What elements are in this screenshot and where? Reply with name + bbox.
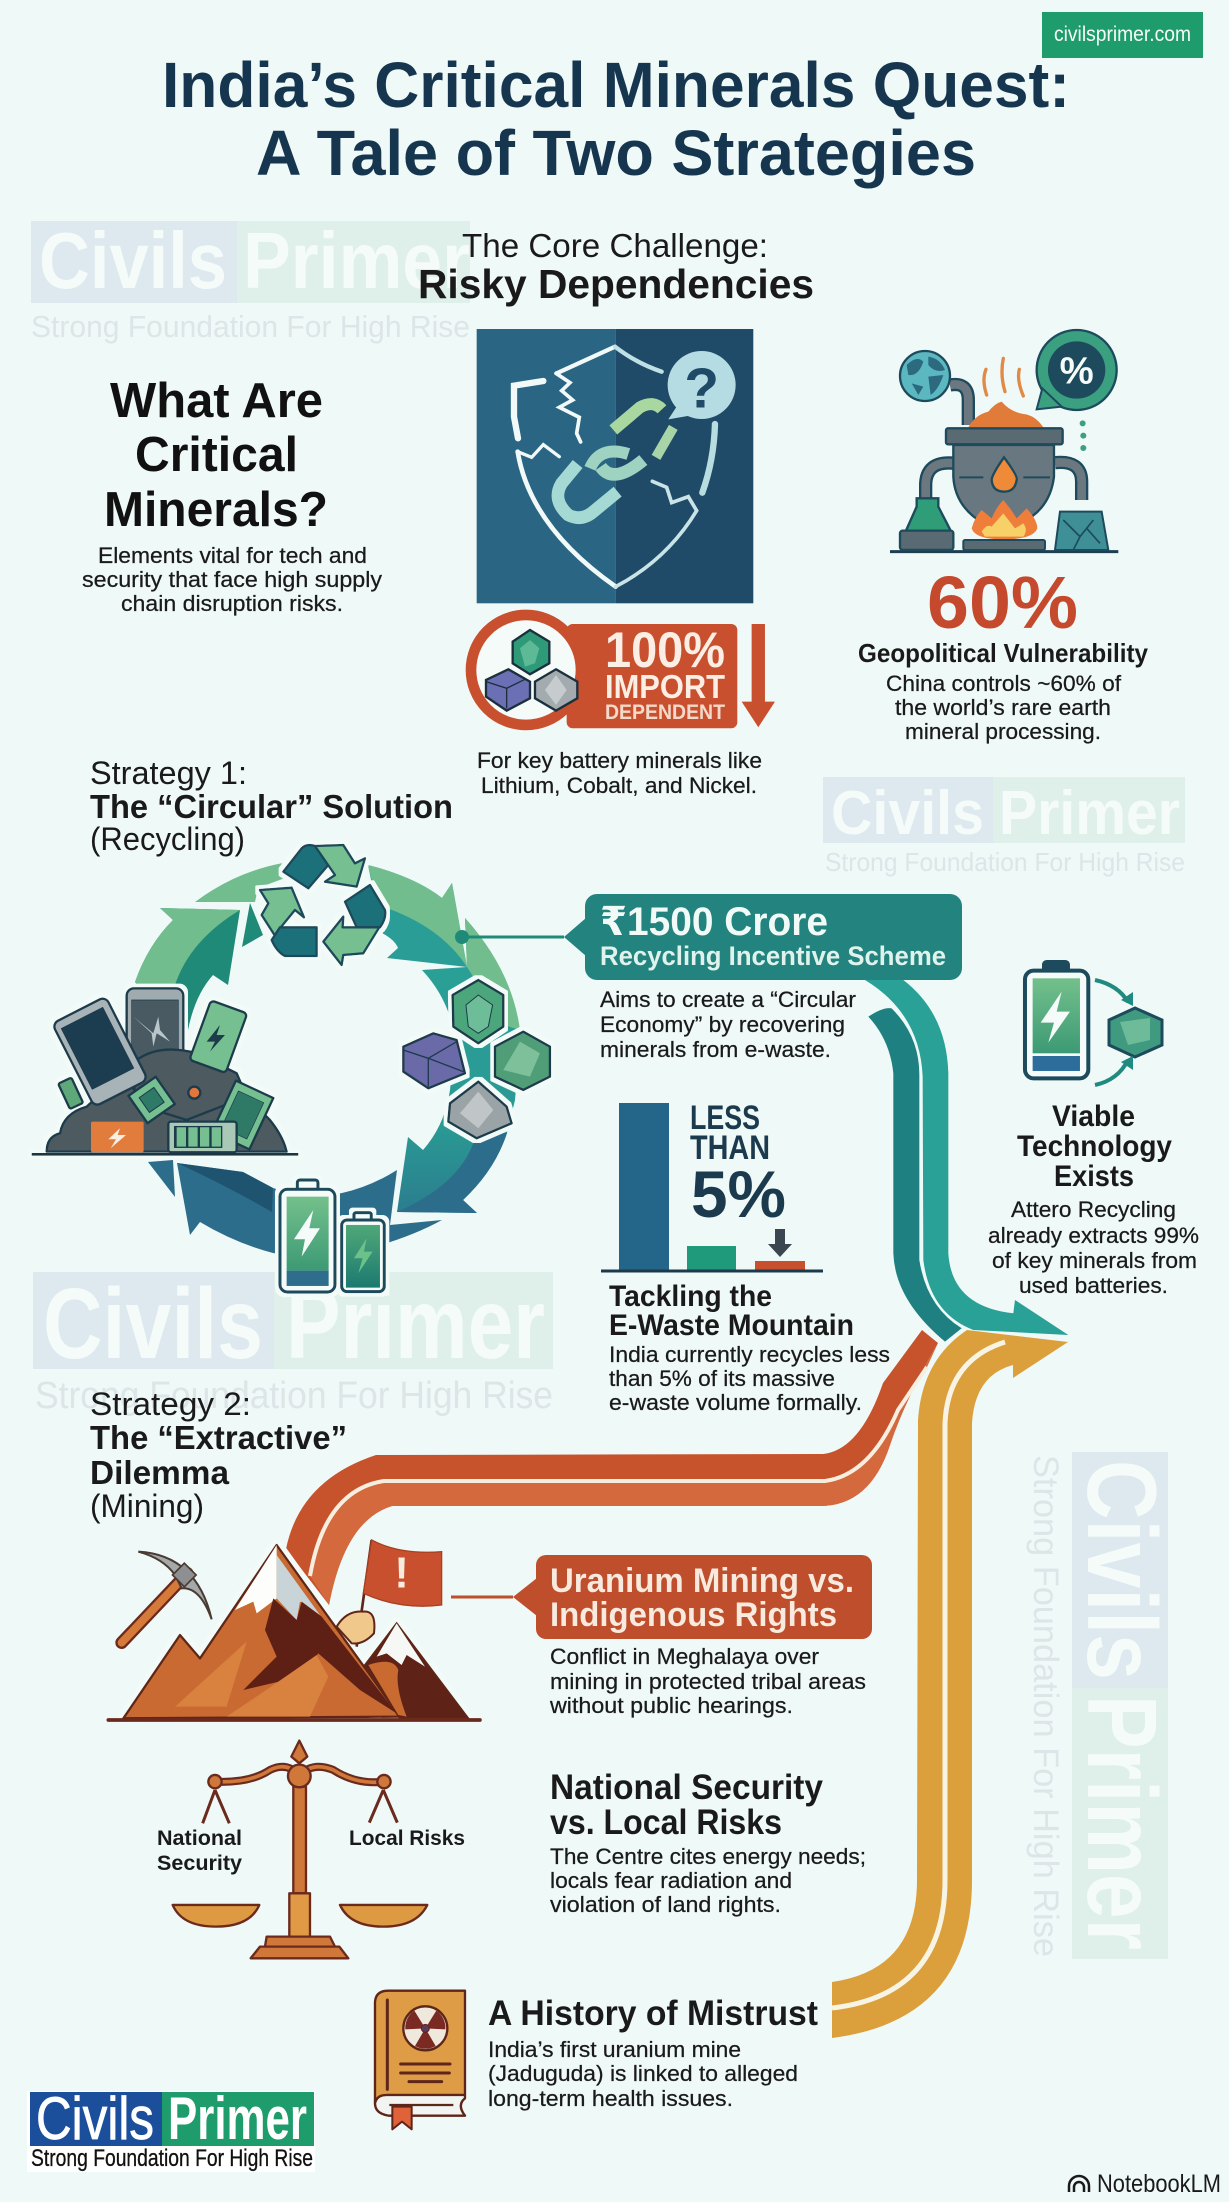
icon: battery to mineral bbox=[1025, 962, 1162, 1085]
callout: recycling scheme: Aims to create a “Circular bbox=[600, 987, 857, 1012]
icon: processing cauldron bbox=[890, 330, 1118, 552]
bar chart: less than 5%: LESS bbox=[690, 1099, 760, 1137]
watermark: middle left: Strong Foundation For High Rise bbox=[35, 1375, 553, 1417]
panel: what are critical minerals: Elements vital for tech and bbox=[98, 543, 367, 568]
heading: strategy 2: (Mining) bbox=[90, 1488, 204, 1524]
callout: uranium mining bbox=[451, 1555, 872, 1718]
watermark: upper right: Primer bbox=[999, 779, 1180, 848]
icon: recovered minerals bbox=[403, 980, 550, 1138]
panel: viable technology: of key minerals from bbox=[992, 1248, 1197, 1273]
callout: 100% import dependent: 100% bbox=[605, 622, 725, 678]
panel: e-waste mountain: India currently recycles less bbox=[609, 1342, 890, 1367]
arrow: yellow mining flow bbox=[832, 1330, 1068, 2038]
watermark: middle left: Primer bbox=[286, 1268, 545, 1380]
heading: strategy 1: The “Circular” Solution bbox=[90, 788, 453, 825]
icon: mountain with pickaxe and flag bbox=[108, 1540, 480, 1720]
panel: national security vs local risks bbox=[550, 1768, 866, 1917]
bar chart: less than 5%: 5% bbox=[691, 1157, 786, 1231]
callout: 100% import dependent bbox=[471, 615, 775, 728]
panel: what are critical minerals: Critical bbox=[135, 428, 298, 482]
watermark: upper right bbox=[823, 777, 1185, 877]
watermark: top left bbox=[31, 216, 470, 344]
website badge bbox=[1042, 12, 1203, 58]
connector dot bbox=[455, 930, 469, 944]
heading: core challenge bbox=[418, 227, 814, 307]
watermark: top left: Civils bbox=[39, 216, 227, 305]
callout: 100% import dependent: IMPORT bbox=[605, 668, 725, 705]
icon: balance scale: National bbox=[157, 1827, 242, 1850]
panel: what are critical minerals: What Are bbox=[110, 374, 323, 428]
panel: what are critical minerals: Minerals? bbox=[104, 483, 328, 537]
panel: history of mistrust bbox=[488, 1994, 818, 2111]
panel: e-waste mountain: E-Waste Mountain bbox=[609, 1309, 854, 1342]
callout: recycling scheme: Recycling Incentive Scheme bbox=[600, 941, 946, 971]
callout: recycling scheme: minerals from e-waste. bbox=[600, 1037, 831, 1062]
text: battery minerals: Lithium, Cobalt, and Nickel. bbox=[481, 773, 757, 798]
heading: strategy 2: Strategy 2: bbox=[90, 1386, 251, 1422]
watermark: top left: Strong Foundation For High Rise bbox=[31, 309, 470, 344]
stat: 60% geopolitical vulnerability: Geopolitical Vulnerability bbox=[858, 638, 1148, 668]
logo: Civils Primer: Primer bbox=[168, 2085, 307, 2152]
panel: e-waste mountain: e-waste volume formally. bbox=[609, 1390, 862, 1415]
callout: uranium mining: without public hearings. bbox=[549, 1693, 793, 1718]
panel: history of mistrust: long-term health issues. bbox=[488, 2086, 733, 2111]
panel: viable technology bbox=[988, 1100, 1199, 1298]
callout: recycling scheme: ₹1500 Crore bbox=[600, 900, 828, 944]
panel: viable technology: Viable bbox=[1052, 1100, 1135, 1133]
panel: history of mistrust: (Jaduguda) is linked to alleged bbox=[488, 2061, 798, 2086]
callout: uranium mining: Conflict in Meghalaya over bbox=[550, 1644, 820, 1669]
watermark: vertical right: Primer bbox=[1067, 1695, 1177, 1950]
stat: 60% geopolitical vulnerability: 60% bbox=[927, 561, 1078, 644]
watermark: vertical right: Civils bbox=[1067, 1460, 1177, 1680]
heading: strategy 2 bbox=[90, 1386, 347, 1524]
stat: 60% geopolitical vulnerability: the world’s rare earth bbox=[895, 695, 1111, 720]
icon: balance scale: Security bbox=[157, 1852, 242, 1875]
heading: strategy 2: The “Extractive” bbox=[90, 1419, 347, 1456]
icon: broken shield and chain bbox=[477, 329, 753, 603]
panel: what are critical minerals bbox=[82, 374, 383, 616]
panel: viable technology: used batteries. bbox=[1019, 1273, 1168, 1298]
panel: national security vs local risks: violation of land rights. bbox=[550, 1892, 781, 1917]
callout: uranium mining: Indigenous Rights bbox=[550, 1596, 837, 1634]
icon: e-waste pile bbox=[32, 988, 298, 1154]
icon: book with radiation symbol bbox=[375, 1991, 465, 2129]
watermark: vertical right bbox=[1026, 1452, 1177, 1959]
icon: mountain with pickaxe and flag: ! bbox=[394, 1549, 409, 1597]
diagram: circular economy loop bbox=[32, 845, 550, 1292]
panel: history of mistrust: India’s first uranium mine bbox=[488, 2037, 741, 2062]
arrow: red extractive flow bbox=[286, 1330, 938, 1605]
title: India’s Critical Minerals Quest: bbox=[162, 49, 1070, 121]
title: A Tale of Two Strategies bbox=[256, 117, 976, 189]
panel: e-waste mountain: Tackling the bbox=[609, 1280, 772, 1313]
stat: 60% geopolitical vulnerability bbox=[858, 561, 1148, 744]
logo: Civils Primer bbox=[27, 2085, 315, 2172]
title bbox=[162, 49, 1070, 189]
panel: history of mistrust: A History of Mistrust bbox=[488, 1994, 818, 2033]
bar chart: less than 5% bbox=[601, 1099, 823, 1271]
bar chart: less than 5%: THAN bbox=[690, 1129, 770, 1167]
panel: viable technology: already extracts 99% bbox=[988, 1223, 1199, 1248]
heading: core challenge: Risky Dependencies bbox=[418, 261, 814, 307]
icon: recycling symbol bbox=[260, 845, 385, 965]
arrow: bottom of loop bbox=[148, 1160, 442, 1256]
heading: core challenge: The Core Challenge: bbox=[462, 227, 768, 264]
callout: uranium mining: mining in protected tribal areas bbox=[550, 1669, 866, 1694]
icon: balance scale: Local Risks bbox=[349, 1827, 465, 1850]
panel: viable technology: Exists bbox=[1054, 1160, 1134, 1193]
panel: e-waste mountain: than 5% of its massive bbox=[609, 1366, 835, 1391]
watermark: upper right: Strong Foundation For High Rise bbox=[825, 847, 1185, 877]
watermark: middle left: Civils bbox=[43, 1268, 263, 1380]
callout: recycling scheme bbox=[462, 894, 962, 1062]
icon: balance scale bbox=[157, 1741, 465, 1958]
callout: uranium mining: Uranium Mining vs. bbox=[550, 1562, 854, 1600]
panel: national security vs local risks: The Centre cites energy needs; bbox=[550, 1844, 866, 1869]
heading: strategy 1: (Recycling) bbox=[90, 821, 245, 857]
panel: what are critical minerals: chain disruption risks. bbox=[121, 591, 343, 616]
panel: e-waste mountain bbox=[609, 1280, 890, 1415]
icon: batteries bbox=[280, 1180, 384, 1292]
arrow: teal recycling flow bbox=[865, 980, 1068, 1342]
logo: Civils Primer: Strong Foundation For High Rise bbox=[31, 2145, 313, 2172]
logo: Civils Primer: Civils bbox=[36, 2085, 154, 2152]
stat: 60% geopolitical vulnerability: mineral processing. bbox=[905, 719, 1101, 744]
watermark: vertical right: Strong Foundation For High Rise bbox=[1026, 1455, 1065, 1957]
callout: 100% import dependent: DEPENDENT bbox=[605, 701, 725, 724]
watermark: upper right: Civils bbox=[831, 779, 984, 848]
text: battery minerals bbox=[477, 748, 762, 798]
stat: 60% geopolitical vulnerability: China controls ~60% of bbox=[886, 671, 1122, 696]
watermark: middle left bbox=[33, 1268, 553, 1417]
arrow: right of loop bbox=[397, 918, 520, 1213]
icon: processing cauldron: % bbox=[1060, 349, 1094, 392]
heading: strategy 1: Strategy 1: bbox=[90, 755, 247, 791]
watermark: top left: Primer bbox=[243, 216, 470, 305]
panel: viable technology: Attero Recycling bbox=[1011, 1197, 1176, 1222]
panel: national security vs local risks: vs. Local Risks bbox=[550, 1803, 782, 1842]
arrow: top right of loop bbox=[368, 865, 467, 967]
website badge: civilsprimer.com bbox=[1054, 23, 1191, 46]
callout: recycling scheme: Economy” by recovering bbox=[600, 1012, 845, 1037]
panel: viable technology: Technology bbox=[1017, 1130, 1172, 1163]
heading: strategy 2: Dilemma bbox=[90, 1454, 230, 1491]
panel: what are critical minerals: security that face high supply bbox=[82, 567, 383, 592]
panel: national security vs local risks: locals fear radiation and bbox=[550, 1868, 792, 1893]
panel: national security vs local risks: National Security bbox=[550, 1768, 824, 1807]
icon: broken shield and chain: ? bbox=[684, 357, 719, 420]
heading: strategy 1 bbox=[90, 755, 453, 857]
arrow: left of loop bbox=[135, 863, 285, 1030]
text: battery minerals: For key battery minerals like bbox=[477, 748, 762, 773]
